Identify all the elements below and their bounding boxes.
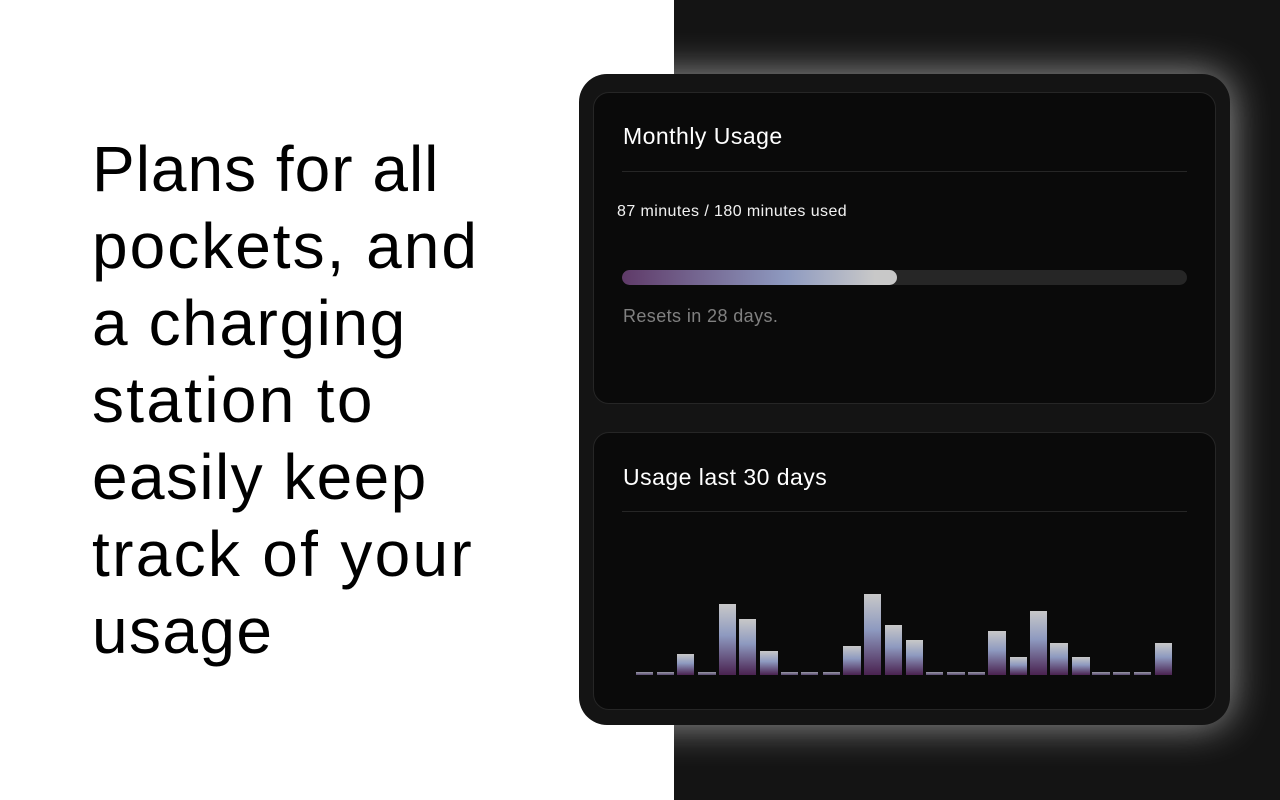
- heading: usage last 30 days: Usage last 30 days: [623, 464, 827, 490]
- bar chart: [636, 594, 1172, 675]
- device card: [579, 74, 1230, 725]
- headline: usage: [92, 595, 273, 667]
- heading: monthly usage: Monthly Usage: [623, 123, 783, 149]
- headline: pockets, and: [92, 210, 479, 282]
- panel: monthly usage: [593, 92, 1216, 404]
- panel: usage last 30 days: [593, 432, 1216, 710]
- headline: a charging: [92, 287, 407, 359]
- headline: [92, 133, 479, 667]
- headline: Plans for all: [92, 133, 439, 205]
- reset note: Resets in 28 days.: [623, 306, 778, 326]
- headline: easily keep: [92, 441, 428, 513]
- progress fill: [622, 270, 897, 285]
- progress bar: [622, 270, 1187, 285]
- usage text: 87 minutes / 180 minutes used: [617, 203, 847, 220]
- dark background panel: [674, 0, 1280, 800]
- headline: track of your: [92, 518, 474, 590]
- headline: station to: [92, 364, 375, 436]
